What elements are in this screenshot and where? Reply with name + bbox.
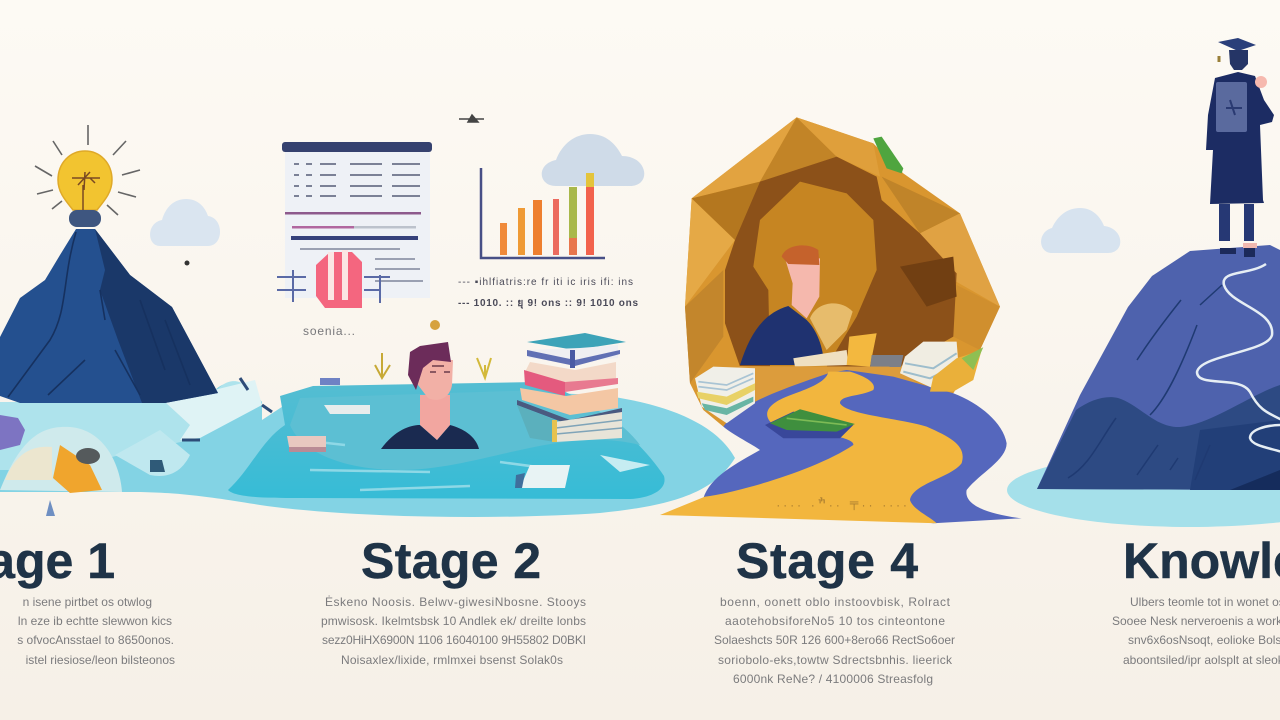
text: stage 4	[714, 595, 955, 686]
text: knowledge	[1112, 595, 1280, 667]
text: stage 2: Noisaxlex/lixide, rmlmxei bsenst Solak0s	[341, 653, 563, 667]
arrows and floating icons	[320, 320, 491, 385]
shirt	[381, 425, 479, 449]
items floating: left water	[0, 378, 272, 516]
dotted trail text: .... .ׯ.. ╤.. ....	[777, 496, 907, 511]
text: stage 4: 6000nk ReNe? / 4100006 Streasfolg	[733, 672, 933, 686]
winding river: blue	[703, 370, 1022, 523]
floating books	[287, 405, 650, 488]
text: stage 4: aaotehobsiforeNo5 10 tos cinteontone	[725, 614, 945, 628]
graduate figure	[1206, 38, 1274, 257]
cloud: left	[150, 199, 220, 246]
pond under final mountain	[1007, 453, 1280, 527]
final mountain	[1037, 245, 1280, 490]
text: stage 1	[17, 595, 175, 667]
text: stage 1: s ofvocAnsstael to 8650onos.	[17, 633, 174, 647]
cave	[660, 117, 1022, 523]
face	[417, 360, 453, 400]
chart note text	[458, 277, 638, 309]
text: stage 2: sezz0HiHX6900N 1106 16040100 9H55802 D0BKI	[322, 633, 586, 647]
person swimming	[381, 342, 479, 449]
icon: lightbulb	[35, 125, 140, 227]
cloud: right	[1041, 208, 1120, 253]
dot	[184, 260, 190, 266]
stack of books	[517, 333, 626, 442]
text: stage 1: istel riesiose/leon bilsteonos	[26, 653, 175, 667]
text: stage 4: soriobolo-eks,towtw Sdrectsbnhis. lieerick	[718, 653, 953, 667]
small table rows	[294, 163, 420, 197]
mountain: stage 1	[0, 229, 218, 403]
document panel	[277, 142, 432, 338]
heading: stage 2: Stage 2	[361, 533, 541, 589]
heading: stage 4: Stage 4	[736, 533, 918, 589]
bar chart	[481, 168, 605, 258]
text: stage 1: n isene pirtbet os otwlog	[23, 595, 152, 609]
plane mark	[459, 115, 484, 122]
green leaf boat	[765, 409, 855, 438]
chart note text: --- ▪ihlfiatris:re fr iti ic iris ifi: ins	[458, 277, 633, 288]
cave floor	[700, 366, 927, 410]
hair	[408, 342, 451, 390]
text: stage 2: Ėskeno Noosis. Belwv-giwesiNbosne. Stooys	[325, 595, 586, 609]
chart note text: --- 1010. :: ยุ 9! ons :: 9! 1010 ons	[458, 298, 638, 309]
text: stage 4: boenn, oonett oblo instoovbisk, Rolract	[720, 595, 951, 609]
left book stack	[695, 367, 755, 423]
green moss on cave top	[873, 137, 903, 173]
neck	[420, 395, 450, 440]
text: stage 2	[321, 595, 586, 667]
text: stage 2: pmwisosk. Ikelmtsbsk 10 Andlek ek/ dreilte lonbs	[321, 614, 586, 628]
caption: soenia...	[303, 324, 355, 338]
water: flooded plain	[0, 380, 735, 517]
text: stage 4: Solaeshcts 50R 126 600+8ero66 RectSo6oer	[714, 633, 955, 647]
cloud: behind chart	[542, 134, 644, 186]
text: stage 1: ln eze ib echtte slewwon kics	[18, 614, 172, 628]
winding river: yellow	[660, 372, 963, 523]
mountain with lightbulb	[0, 125, 272, 516]
winding path	[1197, 264, 1280, 452]
cave interior	[725, 157, 957, 367]
right book stack	[900, 342, 983, 392]
icon: pink block	[277, 250, 390, 308]
person reading	[740, 245, 903, 368]
